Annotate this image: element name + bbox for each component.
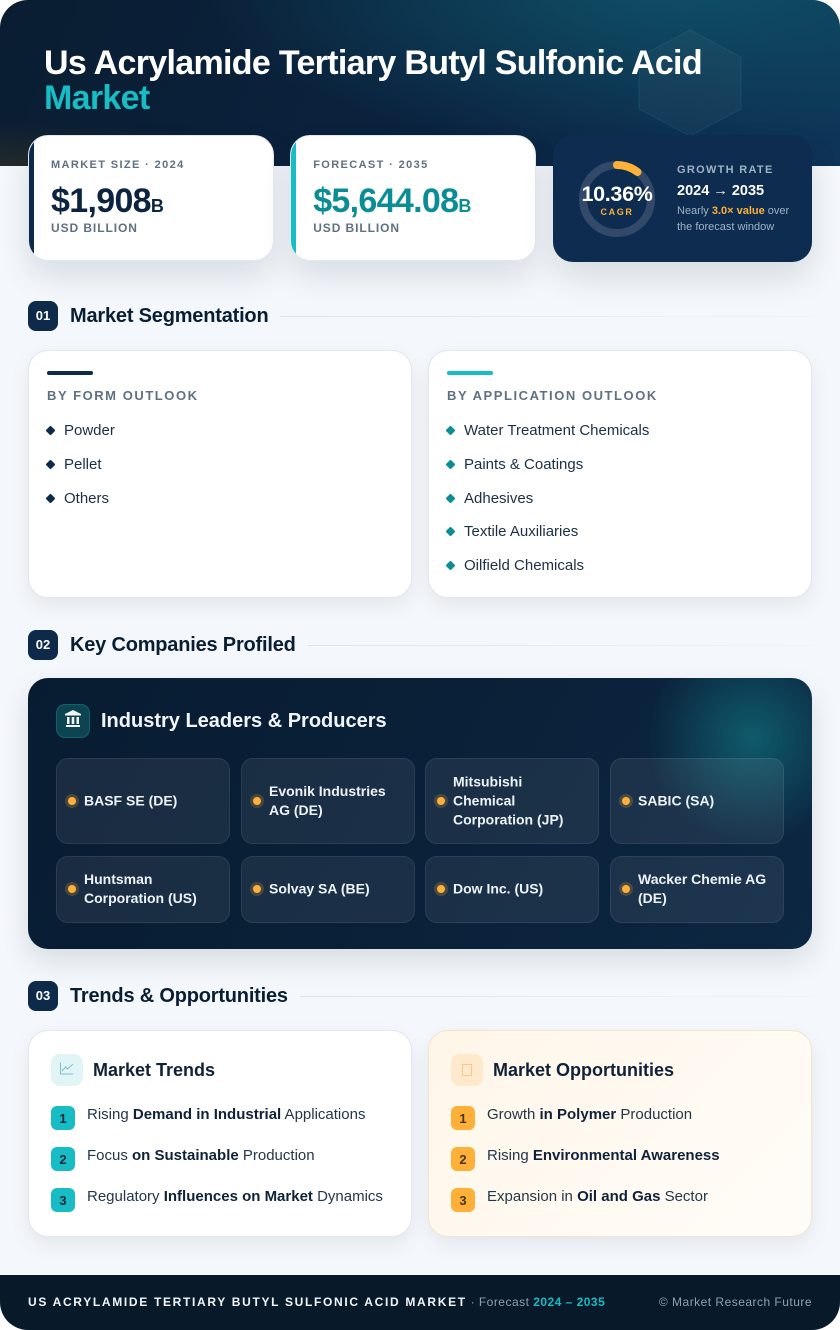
item: Textile Auxiliaries bbox=[464, 523, 578, 540]
company bbox=[425, 856, 599, 923]
title: Us Acrylamide Tertiary Butyl Sulfonic Acid bbox=[44, 44, 702, 82]
trend: Rising Demand in Industrial Applications bbox=[87, 1106, 365, 1123]
CAGR label: CAGR bbox=[601, 207, 633, 217]
item: Others bbox=[64, 490, 109, 507]
panel: market trends bbox=[28, 1030, 412, 1237]
item: Adhesives bbox=[464, 490, 533, 507]
company: Wacker Chemie AG (DE) bbox=[638, 871, 766, 906]
growth rate label: GROWTH RATE bbox=[677, 164, 774, 176]
heading: by application: BY APPLICATION OUTLOOK bbox=[447, 388, 658, 403]
icon: opportunities bbox=[451, 1054, 483, 1086]
number bbox=[451, 1106, 475, 1130]
section number 03 bbox=[28, 981, 58, 1011]
unit: USD BILLION bbox=[313, 221, 400, 235]
period: 2024 → 2035 bbox=[677, 183, 764, 199]
item: Powder bbox=[64, 422, 115, 439]
unit: USD BILLION bbox=[51, 221, 138, 235]
opportunity: Growth in Polymer Production bbox=[487, 1106, 692, 1123]
icon: decorative hexagon bbox=[638, 30, 742, 135]
number: 1 bbox=[459, 1111, 467, 1126]
section number 03: 03 bbox=[36, 988, 50, 1003]
chart: CAGR ring bbox=[579, 161, 655, 237]
label: forecast: FORECAST · 2035 bbox=[313, 159, 429, 171]
number bbox=[451, 1188, 475, 1212]
footer bbox=[0, 1275, 840, 1330]
number: 2 bbox=[459, 1152, 467, 1167]
heading: market trends: Market Trends bbox=[93, 1060, 215, 1080]
company bbox=[56, 856, 230, 923]
header banner bbox=[0, 0, 840, 166]
heading: key companies: Key Companies Profiled bbox=[70, 634, 296, 656]
number: 1 bbox=[59, 1111, 67, 1126]
value: market size: $1,908B bbox=[51, 182, 164, 220]
heading: opportunities: Market Opportunities bbox=[493, 1060, 674, 1080]
copyright: © Market Research Future bbox=[659, 1295, 812, 1309]
number bbox=[451, 1147, 475, 1171]
section number 01: 01 bbox=[36, 308, 50, 323]
number: 3 bbox=[459, 1193, 467, 1208]
stat card: market size bbox=[28, 135, 274, 261]
company: SABIC (SA) bbox=[638, 793, 714, 809]
opportunity: Rising Environmental Awareness bbox=[487, 1147, 720, 1164]
panel: industry leaders bbox=[28, 678, 812, 949]
company: Mitsubishi Chemical Corporation (JP) bbox=[453, 774, 563, 828]
heading: industry leaders: Industry Leaders & Producers bbox=[101, 710, 387, 732]
number: 3 bbox=[59, 1193, 67, 1208]
section number 02: 02 bbox=[36, 637, 50, 652]
item: Oilfield Chemicals bbox=[464, 557, 584, 574]
company bbox=[610, 856, 784, 923]
company: Evonik Industries AG (DE) bbox=[269, 783, 386, 818]
opportunity: Expansion in Oil and Gas Sector bbox=[487, 1188, 708, 1205]
number bbox=[51, 1188, 75, 1212]
description bbox=[677, 205, 789, 233]
heading: trends: Trends & Opportunities bbox=[70, 985, 288, 1007]
company: Dow Inc. (US) bbox=[453, 881, 543, 897]
company bbox=[241, 758, 415, 844]
panel: market opportunities bbox=[428, 1030, 812, 1237]
company bbox=[610, 758, 784, 844]
icon: chart bbox=[51, 1054, 83, 1086]
growth rate card bbox=[553, 135, 812, 262]
number bbox=[51, 1106, 75, 1130]
title bbox=[44, 44, 702, 117]
footer title: US ACRYLAMIDE TERTIARY BUTYL SULFONIC ACID MARKET · Forecast 2024 – 2035 bbox=[28, 1295, 605, 1309]
item: Water Treatment Chemicals bbox=[464, 422, 649, 439]
number: 2 bbox=[59, 1152, 67, 1167]
CAGR value: 10.36% bbox=[581, 182, 653, 206]
company bbox=[425, 758, 599, 844]
company: Huntsman Corporation (US) bbox=[84, 871, 197, 906]
value: forecast: $5,644.08B bbox=[313, 182, 471, 220]
number bbox=[51, 1147, 75, 1171]
item: Pellet bbox=[64, 456, 102, 473]
description: the forecast window bbox=[677, 221, 774, 233]
icon: institution bbox=[56, 704, 90, 738]
panel: form outlook bbox=[28, 350, 412, 598]
title: Market bbox=[44, 79, 150, 117]
item: Paints & Coatings bbox=[464, 456, 583, 473]
heading: market segmentation: Market Segmentation bbox=[70, 305, 268, 327]
company bbox=[241, 856, 415, 923]
trend: Focus on Sustainable Production bbox=[87, 1147, 315, 1164]
stat card: forecast bbox=[290, 135, 536, 261]
company: BASF SE (DE) bbox=[84, 793, 177, 809]
trend: Regulatory Influences on Market Dynamics bbox=[87, 1188, 383, 1205]
section number 02 bbox=[28, 630, 58, 660]
heading: by form: BY FORM OUTLOOK bbox=[47, 388, 199, 403]
label: market size: MARKET SIZE · 2024 bbox=[51, 159, 185, 171]
description: Nearly 3.0× value over bbox=[677, 205, 789, 217]
section number 01 bbox=[28, 301, 58, 331]
panel: application outlook bbox=[428, 350, 812, 598]
company bbox=[56, 758, 230, 844]
company: Solvay SA (BE) bbox=[269, 881, 370, 897]
